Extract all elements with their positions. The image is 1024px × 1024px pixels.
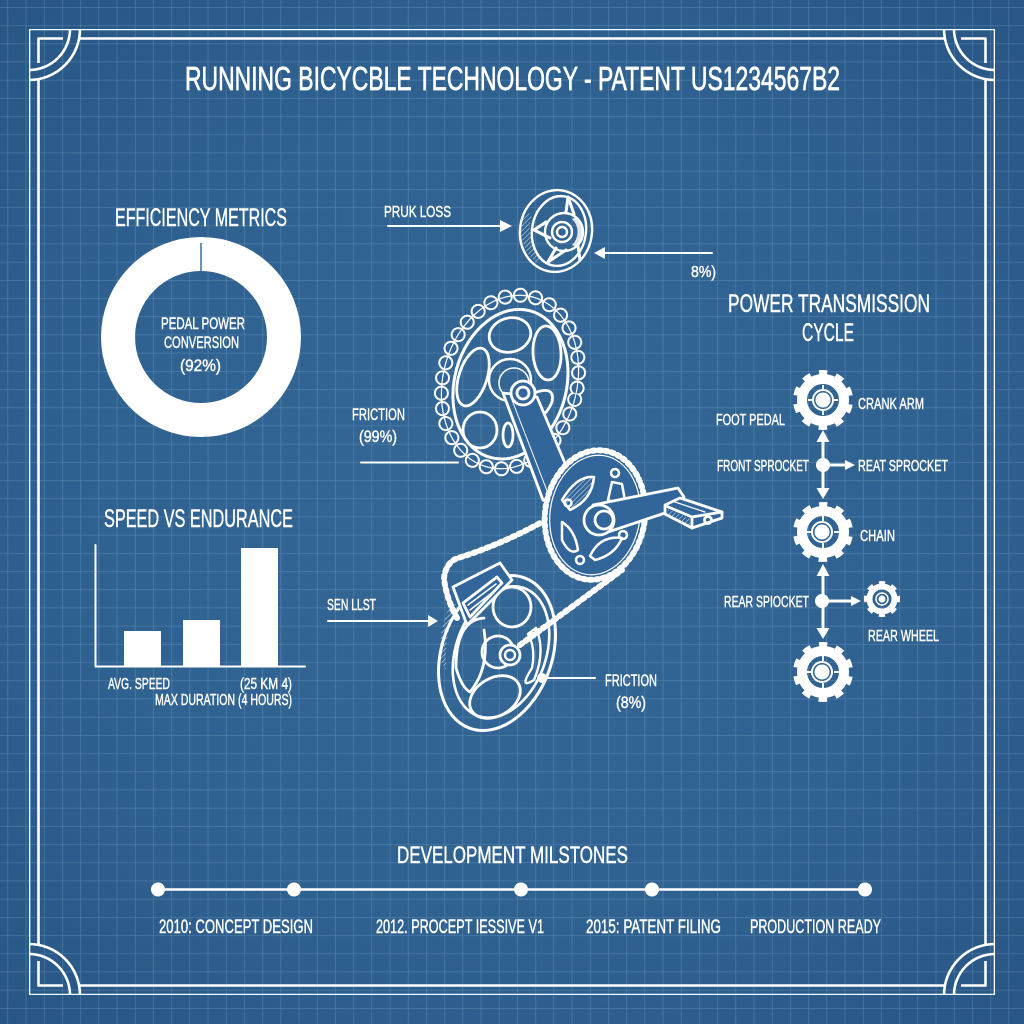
heading: power transmission cycle: CYCLE bbox=[802, 319, 854, 347]
heading: power transmission cycle bbox=[728, 290, 930, 347]
bar chart labels: MAX DURATION (4 HOURS) bbox=[155, 692, 292, 709]
cycle labels: CHAIN bbox=[860, 528, 895, 545]
panel: power transmission cycle bbox=[716, 290, 948, 698]
icon: large front sprocket bbox=[423, 280, 597, 484]
heading: power transmission cycle: POWER TRANSMISSION bbox=[728, 290, 930, 318]
arrows: upper junction bbox=[816, 430, 855, 499]
arrows: lower junction bbox=[815, 564, 861, 639]
cycle labels: FOOT PEDAL bbox=[716, 412, 785, 429]
icon: rear chain wheel bbox=[418, 559, 576, 747]
donut chart bbox=[118, 243, 284, 420]
callout: 8% upper bbox=[594, 247, 716, 281]
callout: 8% upper: 8%) bbox=[691, 264, 716, 281]
donut label: (92%) bbox=[180, 356, 221, 375]
icon: crank arm bbox=[503, 381, 567, 505]
bar chart labels: AVG. SPEED bbox=[108, 676, 170, 693]
callout: peak loss bbox=[384, 204, 512, 232]
callout: friction 8% lower: (8%) bbox=[616, 693, 646, 712]
panel: efficiency metrics bbox=[115, 204, 287, 420]
timeline labels bbox=[159, 917, 881, 938]
bar chart labels bbox=[108, 676, 292, 709]
callout: friction 8% lower: FRICTION bbox=[605, 671, 657, 690]
callout: friction 8% lower bbox=[537, 671, 657, 712]
sprocket cut-outs bbox=[450, 313, 562, 448]
callout: friction 99%: (99%) bbox=[359, 427, 397, 446]
callout: seal list bbox=[327, 597, 438, 627]
cycle labels: REAR SPIOCKET bbox=[724, 594, 809, 611]
icon: left pedal bbox=[453, 563, 512, 625]
callout: friction 99% bbox=[352, 405, 458, 462]
icon: small rear hub wheel bbox=[515, 185, 597, 277]
donut label bbox=[161, 314, 245, 375]
donut label: CONVERSION bbox=[164, 333, 239, 352]
icon: small gear rear wheel bbox=[866, 584, 898, 614]
bar chart bbox=[96, 545, 305, 666]
timeline labels: PRODUCTION READY bbox=[750, 917, 881, 938]
cycle labels: FRONT SPROCKET bbox=[717, 458, 809, 475]
cycle labels: CRANK ARM bbox=[858, 396, 924, 413]
icon: middle chainring bbox=[536, 444, 654, 586]
icon: pedal crank and right pedal bbox=[584, 488, 722, 535]
cycle labels bbox=[716, 396, 948, 645]
cycle labels: REAR WHEEL bbox=[868, 628, 939, 645]
icon: gear crank arm bbox=[797, 374, 849, 426]
cycle labels: REAT SPROCKET bbox=[858, 458, 948, 475]
icon: gear bottom bbox=[797, 646, 849, 698]
callout: friction 99%: FRICTION bbox=[352, 405, 405, 424]
timeline labels: 2010: CONCEPT DESIGN bbox=[159, 917, 313, 938]
icon: gear chain bbox=[797, 506, 849, 558]
heading: efficiency metrics: EFFICIENCY METRICS bbox=[115, 204, 287, 232]
heading: development milestones: DEVELOPMENT MILSTONES bbox=[397, 842, 628, 869]
icon: drive chain bbox=[444, 522, 622, 645]
timeline labels: 2015: PATENT FILING bbox=[586, 917, 721, 938]
callout: seal list: SEN LLST bbox=[327, 597, 376, 614]
timeline bbox=[151, 882, 872, 896]
bar chart labels: (25 KM 4) bbox=[240, 676, 292, 693]
illustration: bicycle drivetrain bbox=[418, 185, 722, 747]
callout: peak loss: PRUK LOSS bbox=[384, 204, 451, 221]
panel: development milestones bbox=[151, 842, 881, 938]
heading: speed vs endurance: SPEED VS ENDURANCE bbox=[104, 505, 293, 533]
donut label: PEDAL POWER bbox=[161, 314, 245, 333]
panel: speed vs endurance bbox=[96, 505, 305, 709]
timeline labels: 2012. PROCEPT IESSIVE V1 bbox=[376, 917, 544, 938]
